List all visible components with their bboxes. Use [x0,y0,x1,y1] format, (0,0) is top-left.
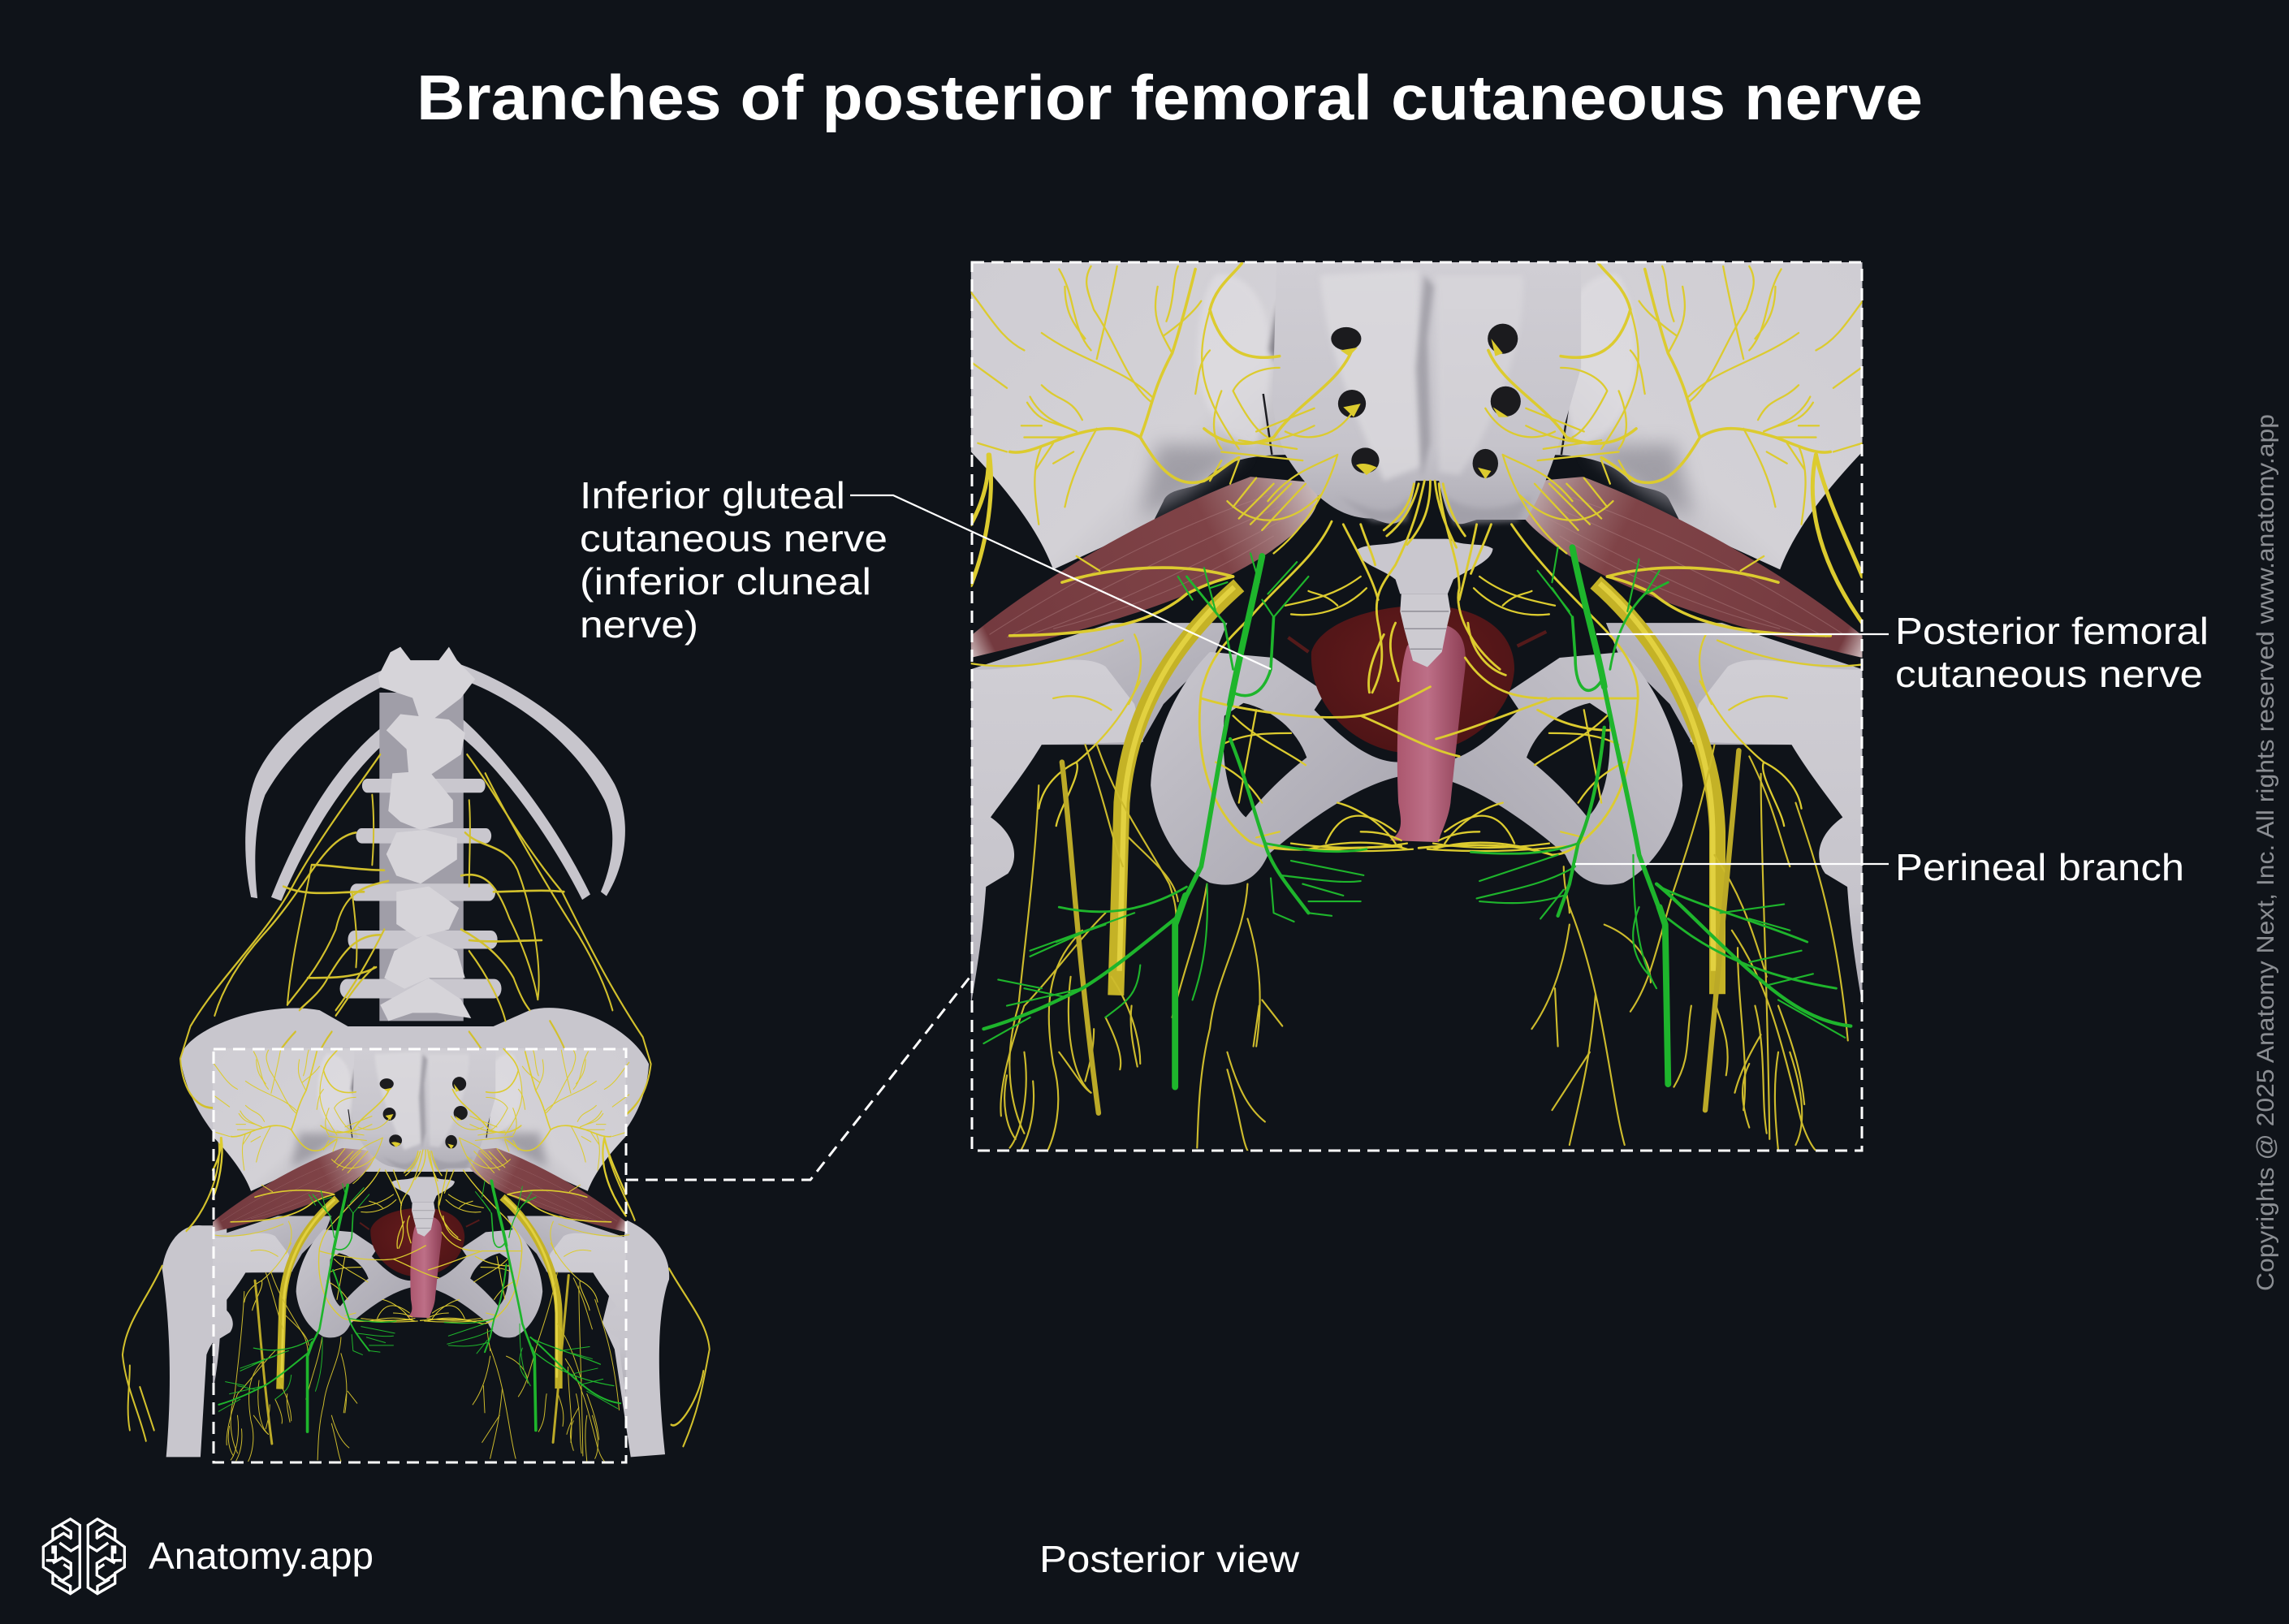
callout: inferior gluteal cutaneous nerve: (inferior cluneal [580,560,871,603]
callout: posterior femoral cutaneous nerve: cutaneous nerve [1895,653,2203,695]
logo: brain icon [43,1519,124,1594]
callout: inferior gluteal cutaneous nerve [580,474,1271,669]
dashed connector from overview box to enlarged panel [626,974,972,1180]
logo wordmark: Anatomy.app [149,1535,374,1577]
femurs [162,1225,227,1457]
callout: inferior gluteal cutaneous nerve: nerve) [580,603,698,646]
title: Branches of posterior femoral cutaneous nerve [417,62,1923,133]
view caption: Posterior view [1039,1538,1300,1580]
lumbar plexus nerves [123,754,710,1446]
overview: upper skeleton and outer nerves [123,647,710,1457]
callout: inferior gluteal cutaneous nerve: Inferior gluteal [580,474,845,516]
copyright notice: Copyrights @ 2025 Anatomy Next, Inc. All rights reserved www.anatomy.app [2252,414,2279,1291]
overview selection box [214,1049,626,1462]
pelvic wings [180,1008,649,1172]
lumbar vertebral column [340,647,502,1021]
enlarged panel dashed frame [972,262,1862,1151]
enlarged anatomy panel [971,262,1869,1151]
overview: pelvis with highlighted nerves (same view as the enlarged panel) [213,1048,629,1462]
small overview anatomy figure: posterior view of lumbar spine and pelvis [123,647,710,1462]
ribs [245,664,625,901]
callout: perineal branch: Perineal branch [1895,846,2184,888]
callout: posterior femoral cutaneous nerve: Posterior femoral [1895,610,2209,652]
callout: inferior gluteal cutaneous nerve: cutaneous nerve [580,517,888,559]
callout: posterior femoral cutaneous nerve [1596,610,2209,695]
